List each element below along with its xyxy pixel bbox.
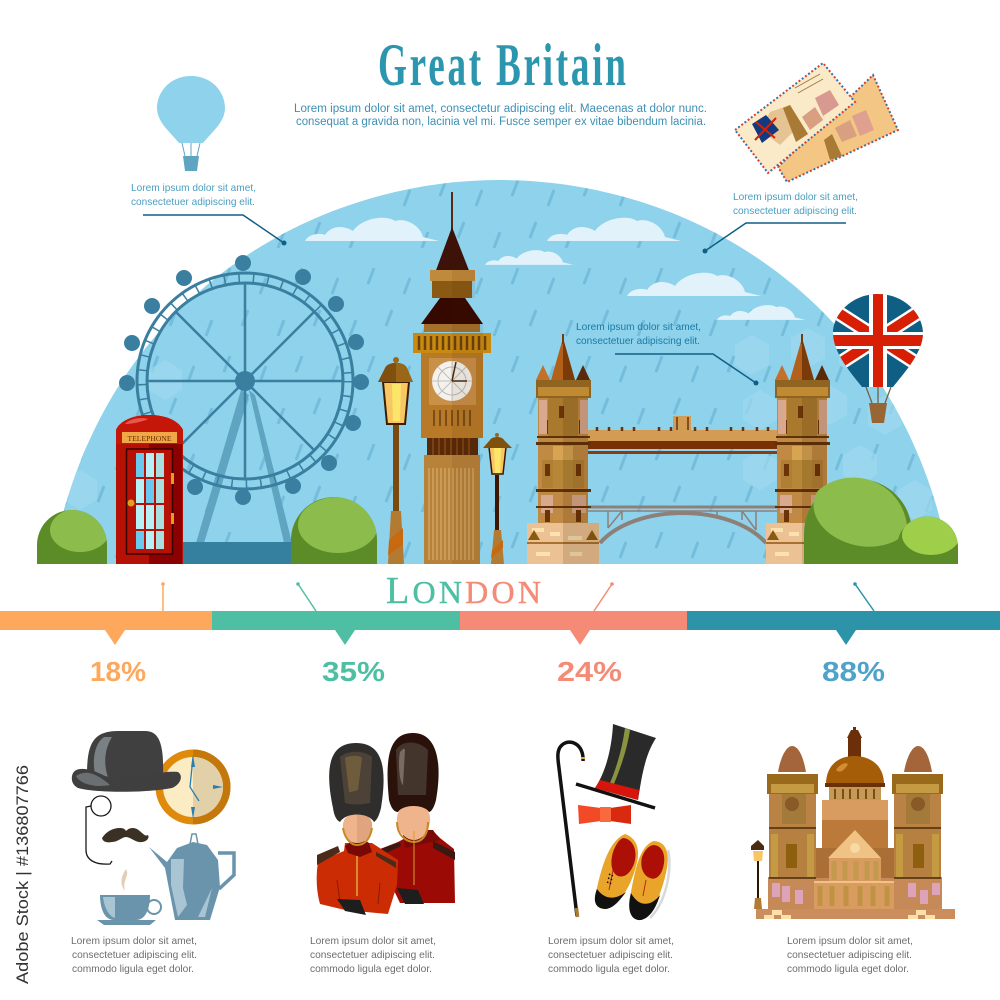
bowler hat	[72, 731, 181, 792]
text block: column 2	[310, 935, 436, 975]
rain	[52, 180, 950, 564]
clouds	[305, 218, 805, 320]
portico	[814, 830, 894, 909]
upper roof	[435, 227, 470, 273]
icon: left bush	[37, 508, 110, 564]
clock section	[421, 353, 483, 438]
text block: column 3: Lorem ipsum dolor sit amet,	[548, 935, 674, 947]
teacup	[97, 869, 161, 925]
icon: palace building	[751, 727, 955, 919]
right palace tower	[892, 746, 943, 878]
dome background	[52, 180, 950, 564]
callout: envelopes: consectetuer adipiscing elit.	[733, 205, 857, 217]
callout: Tower Bridge: consectetuer adipiscing elit.	[576, 335, 700, 347]
text block: column 4: commodo ligula eget dolor.	[787, 963, 909, 975]
panel: London sky dome	[52, 180, 950, 564]
eye legs and base	[180, 390, 298, 564]
pair of shoes	[595, 834, 669, 920]
text block: column 3	[548, 935, 674, 975]
top hat	[576, 724, 656, 808]
icon group: top hat, cane, shoes	[558, 724, 669, 920]
callout: Tower Bridge: Lorem ipsum dolor sit amet,	[576, 321, 701, 333]
text block: column 3: commodo ligula eget dolor.	[548, 963, 670, 975]
moustache	[102, 828, 149, 842]
icon: red telephone box	[116, 415, 183, 564]
text block: column 3: consectetuer adipiscing elit.	[548, 949, 673, 961]
text block: column 2: Lorem ipsum dolor sit amet,	[310, 935, 436, 947]
callout: Tower Bridge	[576, 321, 758, 386]
subtitle text block: Lorem ipsum dolor sit amet, consectetur adipiscing elit. Maecenas at dolor nunc.	[294, 103, 707, 115]
bridge walkway	[588, 416, 778, 454]
front guard	[317, 743, 398, 915]
connector ticks	[163, 584, 874, 611]
subtitle text block	[294, 103, 707, 128]
text block: column 1: Lorem ipsum dolor sit amet,	[71, 935, 197, 947]
callout: envelopes	[702, 191, 858, 254]
icon: envelopes	[735, 63, 898, 182]
text block: column 1: commodo ligula eget dolor.	[72, 963, 194, 975]
text block: column 1	[71, 935, 197, 975]
icon: middle bush	[291, 497, 378, 564]
title: Great Britain	[378, 32, 626, 98]
icon: right large bush	[804, 478, 911, 564]
icon group: gentleman's tea	[72, 731, 234, 925]
left tower	[527, 334, 599, 564]
callout: balloon	[131, 182, 286, 246]
belfry	[413, 270, 491, 353]
eye capsules	[119, 255, 369, 505]
bow tie	[578, 805, 631, 824]
icon: red telephone box: TELEPHONE	[128, 434, 172, 443]
monocle	[86, 796, 112, 864]
illustration: London Eye	[119, 255, 369, 564]
text block: column 4: consectetuer adipiscing elit.	[787, 949, 912, 961]
text block: column 2: commodo ligula eget dolor.	[310, 963, 432, 975]
heading: London: LONDON	[386, 570, 541, 612]
callout: balloon: Lorem ipsum dolor sit amet,	[131, 182, 256, 194]
icon: right small bush	[897, 515, 960, 564]
wall clock	[156, 750, 231, 824]
eye hub	[235, 371, 255, 391]
left palace tower	[767, 746, 818, 878]
callout: envelopes: Lorem ipsum dolor sit amet,	[733, 191, 858, 203]
icon: blue hot air balloon	[157, 76, 225, 171]
illustration: Tower Bridge	[527, 334, 838, 564]
rear guard	[375, 733, 455, 904]
balloon envelope	[833, 294, 923, 387]
back envelope	[778, 75, 898, 182]
front envelope	[735, 63, 855, 173]
stat: 35%: 35%	[322, 656, 385, 687]
subtitle text block: consequat a gravida non, lacinia vel mi. Fusce semper ex vitae bibendum lacinia.	[296, 116, 706, 128]
illustration: Big Ben	[413, 192, 491, 564]
stat: 24%: 24%	[557, 656, 622, 687]
icon: large street lamp	[378, 357, 413, 564]
text block: column 2: consectetuer adipiscing elit.	[310, 949, 435, 961]
band pointers	[105, 630, 125, 645]
text block: column 4: Lorem ipsum dolor sit amet,	[787, 935, 913, 947]
callout: balloon: consectetuer adipiscing elit.	[131, 196, 255, 208]
palace base and walls	[756, 877, 955, 919]
palace lamp	[751, 840, 764, 909]
teapot	[149, 834, 234, 920]
text block: column 1: consectetuer adipiscing elit.	[72, 949, 197, 961]
right tower	[766, 334, 838, 564]
lower arch	[588, 507, 778, 543]
stat: 18%: 18%	[90, 656, 146, 687]
tower shaft	[424, 438, 480, 564]
clock tower spire	[451, 192, 453, 230]
walking cane	[558, 742, 585, 917]
icon: small street lamp	[483, 433, 512, 564]
stock credit: Adobe Stock | #136807766	[13, 765, 32, 984]
icon group: royal guards	[317, 733, 455, 915]
eye wheel	[137, 273, 353, 489]
icon: union jack balloon	[833, 294, 923, 423]
central dome	[825, 727, 885, 801]
coloured timeline band	[0, 582, 1000, 645]
text block: column 4	[787, 935, 913, 975]
balloon ropes and basket	[866, 387, 891, 423]
central hall	[816, 800, 894, 878]
stat: 88%: 88%	[822, 656, 885, 687]
clock face	[432, 361, 472, 401]
hexagon pattern	[63, 328, 932, 520]
